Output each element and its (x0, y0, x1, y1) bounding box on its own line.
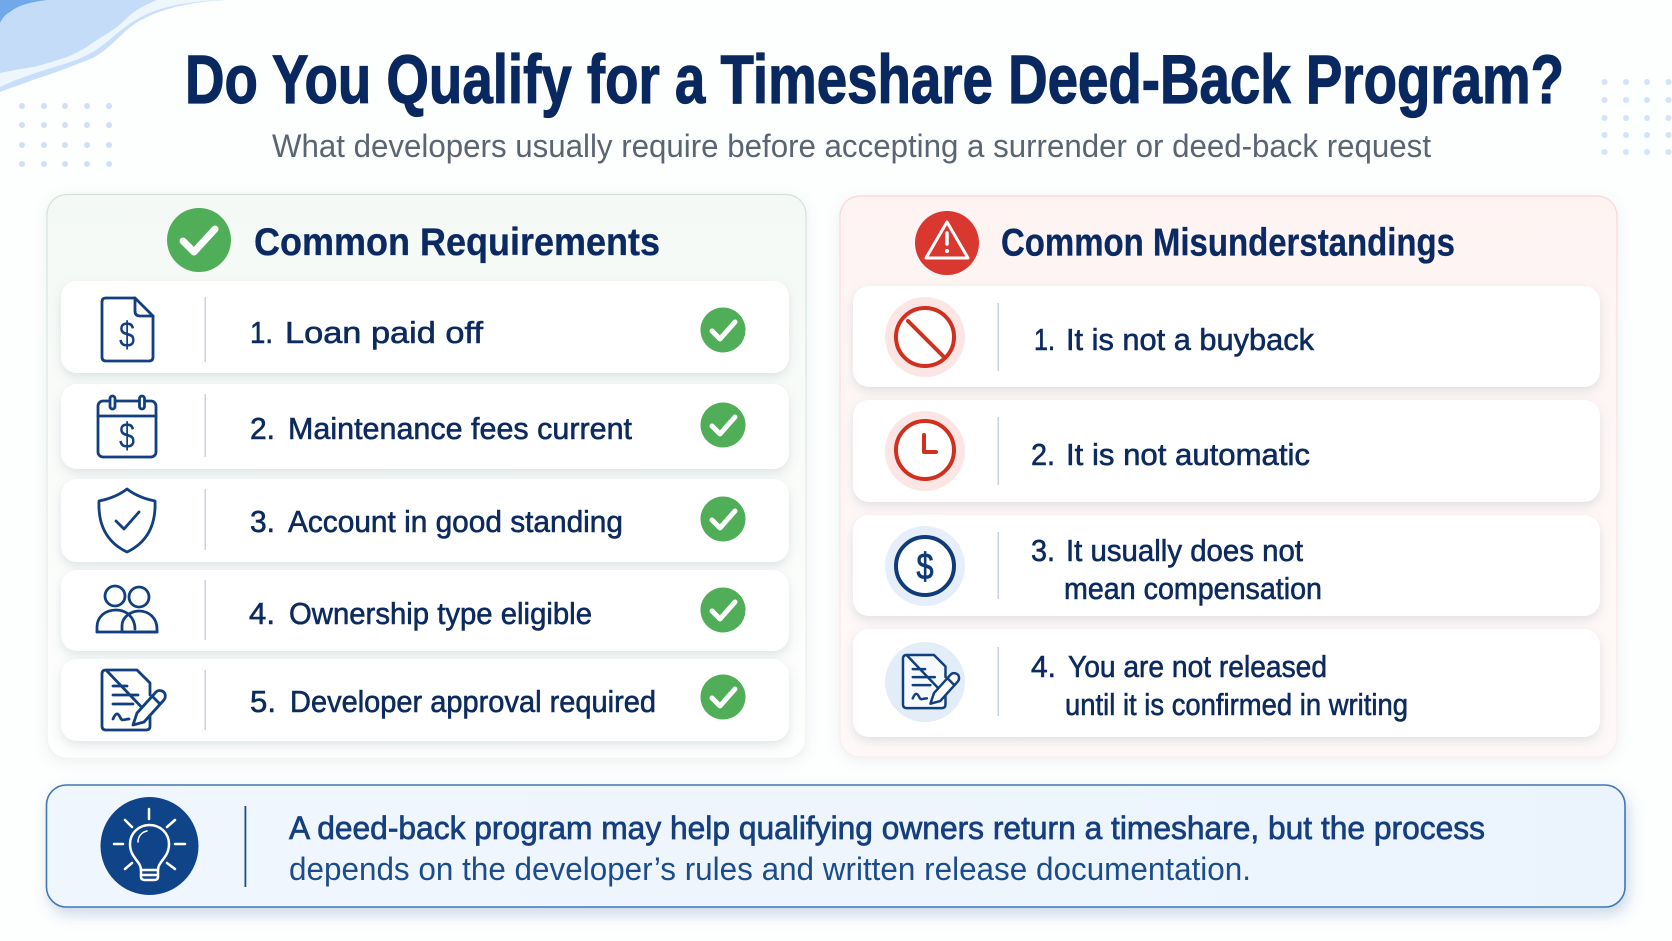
text: ownership type: Ownership type eligible (289, 596, 592, 631)
icon: check (700, 402, 746, 448)
text: not released: until it is confirmed in writing (1065, 687, 1408, 722)
row 4: ownership type (61, 570, 789, 651)
text: developer approval: 5. (250, 684, 276, 719)
text: not automatic: 2. (1031, 437, 1055, 472)
text: not a buyback: It is not a buyback (1066, 322, 1314, 357)
icon: shield check (99, 489, 155, 552)
heading: common requirements: Common Requirements (254, 221, 660, 264)
icon: dollar circle (885, 526, 965, 606)
icon: green check header (167, 208, 231, 272)
subtitle: What developers usually require before accepting a surrender or deed-back request (272, 128, 1431, 164)
text: not compensation: It usually does not (1066, 533, 1303, 568)
callout text: A deed-back program may help qualifying owners return a timeshare, but the process (289, 810, 1485, 846)
icon: check (700, 588, 746, 632)
row 4: not released (853, 629, 1600, 737)
row 5: developer approval (61, 659, 789, 741)
icon: calendar dollar (98, 396, 156, 457)
text: account in good standing: 3. (250, 504, 275, 539)
icon: dollar document (102, 298, 153, 361)
icon: warning header (915, 211, 979, 275)
icon: document with pen (885, 642, 965, 722)
text: not released (1031, 649, 1408, 722)
text: not compensation (1031, 533, 1322, 606)
icon: document with pen (102, 670, 165, 730)
text: not compensation: mean compensation (1064, 571, 1322, 606)
icon: dollar document: $ (119, 314, 135, 355)
icon: clock (885, 411, 965, 491)
text: not released: You are not released (1068, 649, 1327, 684)
text: developer approval: Developer approval required (290, 684, 656, 719)
icon: calendar dollar: $ (119, 415, 135, 456)
callout text: depends on the developer’s rules and written release documentation. (289, 851, 1251, 887)
text: account in good standing: Account in good standing (288, 504, 623, 539)
icon: check (700, 496, 746, 542)
row 2: maintenance fees (61, 384, 789, 469)
icon: dollar circle: $ (916, 546, 934, 587)
icon: prohibited (885, 297, 965, 377)
heading: common misunderstandings: Common Misunderstandings (1001, 222, 1455, 264)
text: maintenance fees: Maintenance fees current (288, 411, 632, 446)
icon: check (700, 674, 746, 720)
decorative dots left (19, 103, 112, 167)
text: loan paid off: 1. (250, 315, 273, 350)
row 3: account in good standing (61, 479, 789, 562)
panel: common requirements (47, 194, 806, 758)
text: not released: 4. (1031, 649, 1056, 684)
row 1: not a buyback (853, 286, 1600, 387)
panel: common misunderstandings (840, 196, 1617, 757)
text: loan paid off: Loan paid off (285, 315, 483, 350)
text: not compensation: 3. (1031, 533, 1055, 568)
icon: check (700, 308, 746, 352)
icon: two people (97, 586, 157, 632)
text: ownership type: 4. (249, 596, 275, 631)
icon: light bulb (100, 797, 198, 895)
callout banner (46, 785, 1625, 907)
row 3: not compensation (853, 515, 1600, 616)
text: maintenance fees: 2. (250, 411, 275, 446)
row 2: not automatic (853, 400, 1600, 502)
decorative dots right (1602, 79, 1672, 155)
decorative corner wave (0, 0, 227, 92)
text: not a buyback: 1. (1034, 322, 1055, 357)
callout text (289, 810, 1485, 887)
row 1: loan paid off (61, 281, 789, 373)
text: not automatic: It is not automatic (1066, 437, 1310, 472)
